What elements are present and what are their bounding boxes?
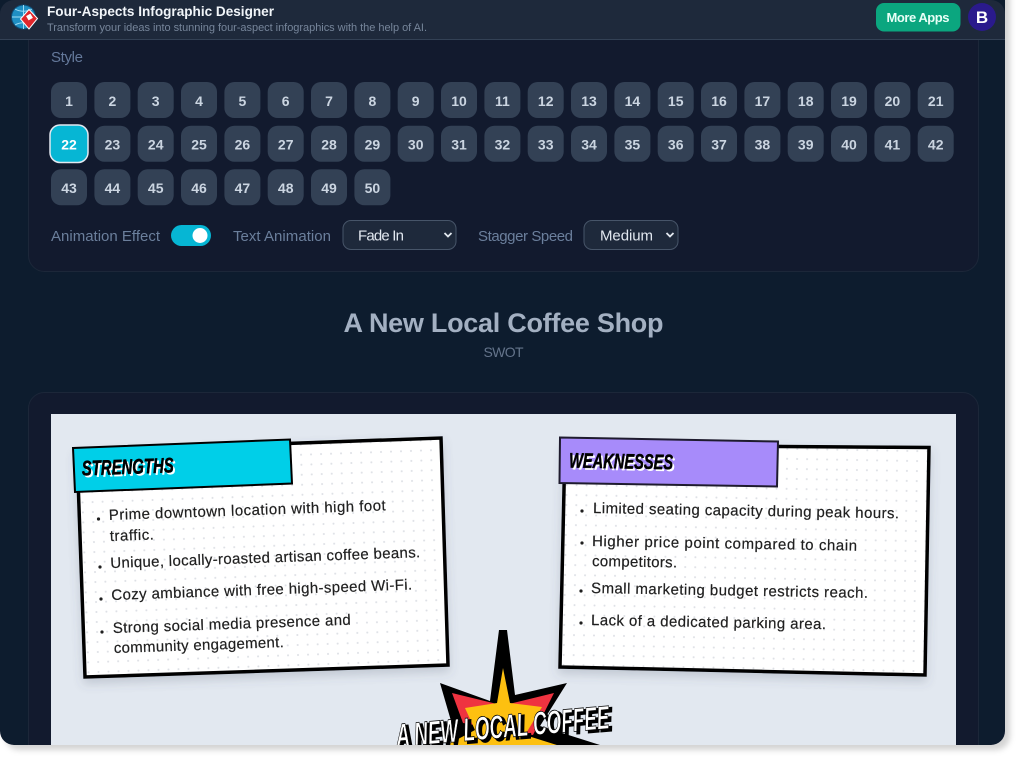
style number buttons: 10: [451, 93, 467, 109]
weaknesses list: Higher price point compared to chain: [592, 533, 857, 555]
panel: style controls: [28, 20, 978, 272]
style number buttons: 3: [152, 93, 160, 109]
style number buttons: 43: [61, 180, 77, 196]
text animation select: [343, 220, 456, 250]
text animation label: Text Animation: [233, 228, 331, 245]
central title shadow: A NEW LOCAL COFFEE: [397, 700, 614, 756]
stagger speed select: Medium: [600, 228, 653, 244]
style number buttons: 45: [148, 180, 164, 196]
style number buttons: 5: [239, 93, 247, 109]
strengths list: community engagement.: [114, 634, 284, 657]
star: yellow layer: [445, 668, 560, 746]
style number buttons: 42: [928, 136, 944, 152]
style number buttons: 36: [668, 136, 684, 152]
style number buttons: 41: [885, 136, 900, 152]
style number buttons: 22: [61, 136, 77, 152]
style number buttons: 21: [928, 93, 944, 109]
style number buttons: 30: [408, 136, 424, 152]
style number buttons: 12: [538, 93, 554, 109]
style number buttons: 9: [412, 93, 420, 109]
style number buttons: 38: [755, 136, 770, 152]
style number buttons: 20: [885, 93, 900, 109]
star: black layer: [440, 630, 600, 745]
style number buttons: 17: [755, 93, 770, 109]
user avatar: [968, 3, 996, 31]
style number buttons: 23: [105, 136, 120, 152]
style number buttons: 32: [495, 136, 510, 152]
style number buttons: 6: [282, 93, 290, 109]
panel: infographic container: [28, 392, 978, 764]
weaknesses header: [560, 438, 778, 486]
user avatar: B: [976, 8, 988, 27]
strengths list: traffic.: [110, 526, 154, 545]
title: A New Local Coffee Shop: [344, 308, 664, 338]
panel: strengths: [73, 438, 448, 677]
subtitle: SWOT: [484, 344, 524, 360]
strengths list: [97, 497, 420, 657]
style number buttons: 29: [365, 136, 380, 152]
style number buttons: 27: [278, 136, 294, 152]
style number buttons: 48: [278, 180, 294, 196]
infographic canvas: [51, 414, 956, 764]
style number buttons: 40: [841, 136, 857, 152]
style number buttons: 11: [495, 93, 510, 109]
more apps button: More Apps: [886, 10, 950, 25]
style number buttons: 14: [625, 93, 640, 109]
header bar: [0, 0, 1005, 40]
style number buttons: 18: [798, 93, 814, 109]
style number buttons: 26: [235, 136, 250, 152]
central starburst title: [396, 630, 612, 745]
app title: Four-Aspects Infographic Designer: [47, 3, 275, 19]
style number buttons: 19: [841, 93, 857, 109]
weaknesses list: Lack of a dedicated parking area.: [591, 612, 826, 633]
style number buttons: 46: [191, 180, 207, 196]
weaknesses list: competitors.: [592, 553, 677, 571]
strengths heading: STRENGTHS: [81, 454, 174, 480]
style number buttons: 49: [321, 180, 337, 196]
style number buttons: [50, 82, 954, 205]
stagger speed select: [584, 220, 678, 250]
icon: globe and book logo: [12, 5, 38, 29]
style number buttons: 15: [668, 93, 684, 109]
star: red layer: [452, 693, 554, 735]
animation toggle: [171, 225, 211, 246]
weaknesses heading: WEAKNESSES: [569, 450, 673, 474]
style number buttons: 13: [581, 93, 597, 109]
weaknesses list: Small marketing budget restricts reach.: [591, 580, 868, 602]
style number buttons: 8: [369, 93, 377, 109]
strengths heading shadow: STRENGTHS: [83, 456, 176, 482]
more apps button: [876, 3, 960, 32]
strengths list: Unique, locally-roasted artisan coffee beans.: [110, 544, 420, 572]
style number buttons: 44: [105, 180, 120, 196]
style number buttons: 24: [148, 136, 164, 152]
style number buttons: 47: [235, 180, 250, 196]
style number buttons: 16: [711, 93, 727, 109]
strengths list: Cozy ambiance with free high-speed Wi-Fi.: [111, 577, 412, 604]
strengths header: [73, 440, 292, 492]
style number buttons: 34: [581, 136, 597, 152]
animation effect label: Animation Effect: [51, 228, 161, 245]
style number buttons: 25: [191, 136, 207, 152]
style number buttons: 35: [625, 136, 640, 152]
central title: A NEW LOCAL COFFEE: [394, 698, 611, 754]
style label: Style: [51, 49, 83, 66]
style number buttons: 2: [109, 93, 117, 109]
style number buttons: 31: [451, 136, 467, 152]
style number buttons: 4: [195, 93, 203, 109]
style number buttons: 39: [798, 136, 814, 152]
text animation select: Fade In: [358, 228, 404, 244]
app tagline: Transform your ideas into stunning four-aspect infographics with the help of AI.: [47, 22, 427, 34]
weaknesses list: Limited seating capacity during peak hours.: [593, 500, 899, 522]
style number buttons: 1: [65, 93, 73, 109]
style number buttons: 28: [321, 136, 337, 152]
weaknesses list: [579, 500, 899, 633]
panel: weaknesses: [560, 438, 929, 675]
style number buttons: 7: [325, 93, 333, 109]
strengths list: Strong social media presence and: [113, 612, 351, 637]
style number buttons: 50: [365, 180, 380, 196]
strengths list: Prime downtown location with high foot: [109, 497, 387, 524]
weaknesses heading shadow: WEAKNESSES: [571, 452, 675, 476]
style number buttons: 33: [538, 136, 554, 152]
stagger speed label: Stagger Speed: [478, 228, 573, 245]
style number buttons: 37: [711, 136, 727, 152]
